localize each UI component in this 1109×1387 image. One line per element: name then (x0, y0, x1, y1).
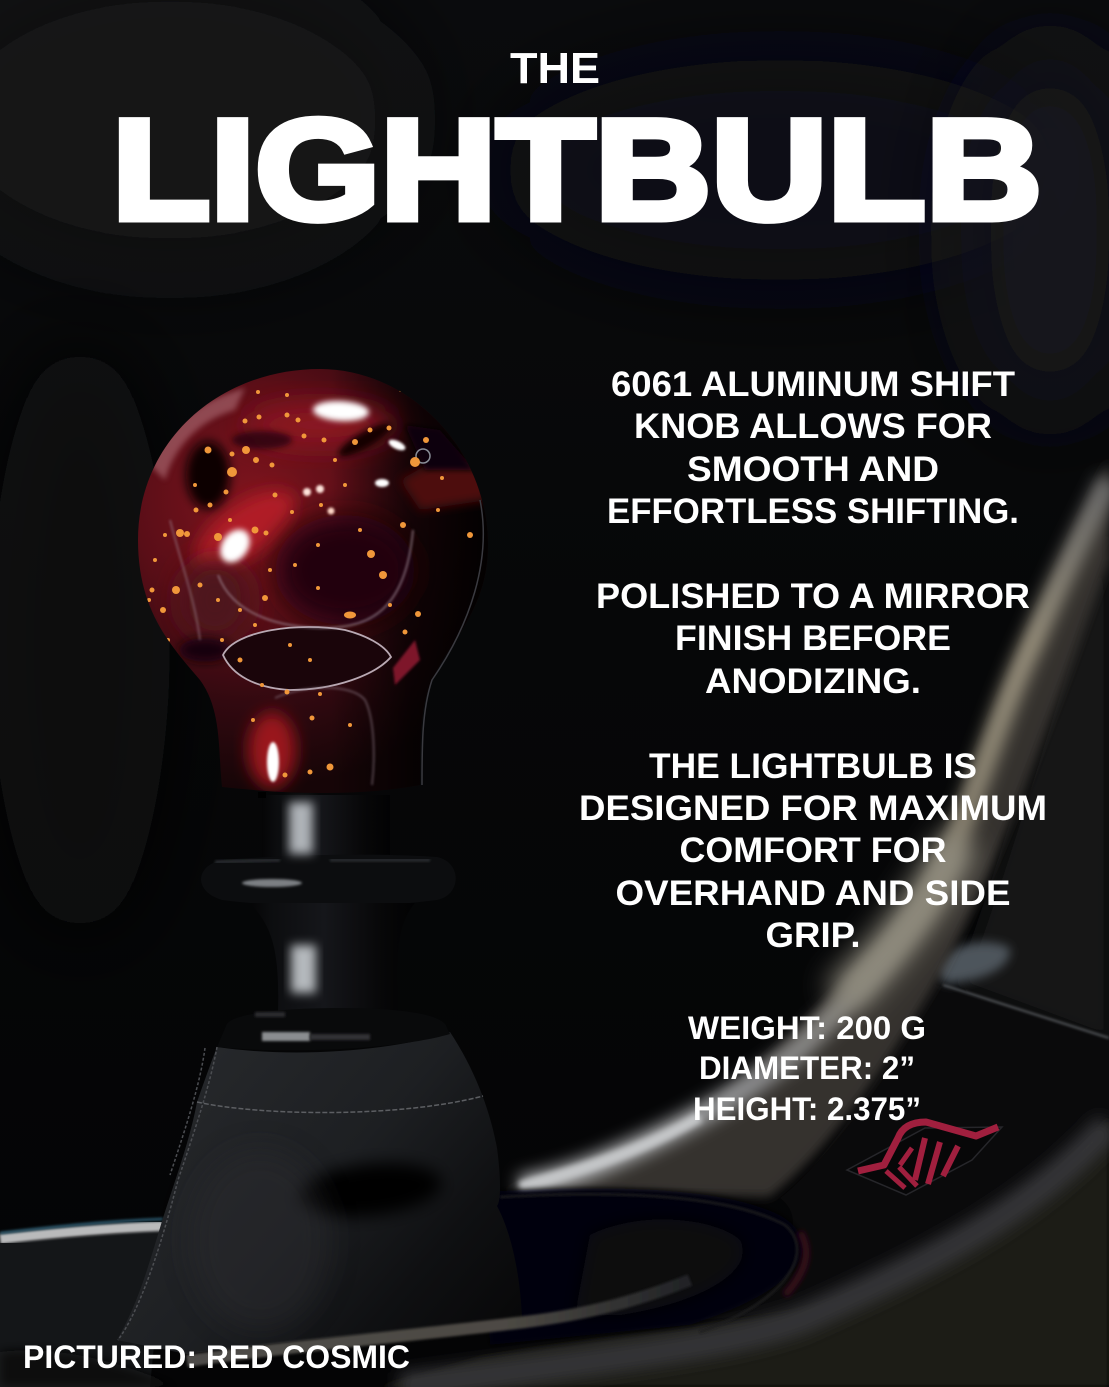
title (112, 44, 1042, 250)
icon: STI badge (847, 1122, 1002, 1195)
text block: polish: POLISHED TO A MIRROR (596, 577, 1030, 616)
text block: aluminum: EFFORTLESS SHIFTING. (607, 492, 1019, 531)
text block: polish: FINISH BEFORE (675, 619, 951, 658)
text block: aluminum: KNOB ALLOWS FOR (634, 407, 992, 446)
lower spoke highlight (933, 942, 1010, 984)
text block: comfort: COMFORT FOR (680, 831, 946, 870)
text block: specifications: HEIGHT: 2.375” (693, 1091, 921, 1127)
orange speckles (147, 388, 473, 778)
base collar (217, 1008, 450, 1050)
column highlight (289, 802, 313, 854)
caption: PICTURED: RED COSMIC (23, 1339, 410, 1375)
text block: comfort: OVERHAND AND SIDE (616, 874, 1010, 913)
right side shadow (138, 369, 488, 793)
knob body (138, 369, 488, 793)
text block: aluminum (607, 365, 1019, 531)
title: the: THE (510, 44, 600, 93)
text block: comfort: GRIP. (766, 916, 860, 955)
white highlights (313, 400, 369, 422)
text block: polish (596, 577, 1030, 701)
bowl reflection (218, 530, 413, 628)
inner console ring (480, 1188, 806, 1345)
title: lightbulb: LIGHTBULB (112, 91, 1042, 250)
shift knob (138, 369, 488, 793)
right side shadow panel (960, 520, 1109, 1040)
steering wheel (505, 460, 1109, 1320)
shifter post (201, 792, 456, 1050)
dark patches (186, 441, 230, 509)
steering wheel lower rim (380, 1117, 1109, 1387)
text block: polish: ANODIZING. (705, 662, 921, 701)
text block: comfort: THE LIGHTBULB IS (649, 747, 977, 786)
stitching (197, 1096, 483, 1113)
text block: comfort: DESIGNED FOR MAXIMUM (579, 789, 1047, 828)
text block: specifications (688, 1010, 926, 1127)
gear boot (117, 1032, 690, 1361)
carbon insert (700, 985, 1109, 1320)
text block: comfort (579, 747, 1047, 955)
text block: aluminum: 6061 ALUMINUM SHIFT (611, 365, 1015, 404)
text block: aluminum: SMOOTH AND (687, 450, 939, 489)
rim streak (187, 1280, 690, 1361)
leather body (117, 1032, 522, 1354)
stem highlight (291, 945, 316, 993)
reflected badge (393, 640, 420, 685)
reflections and glow (147, 388, 488, 788)
flared stem (250, 903, 415, 1012)
grip ring (201, 855, 456, 906)
text block: specifications: WEIGHT: 200 G (688, 1010, 926, 1046)
lens shaped reflection (223, 627, 391, 690)
left console (0, 1219, 180, 1387)
text block: specifications: DIAMETER: 2” (699, 1050, 915, 1086)
upper column (262, 795, 390, 861)
lit rim band (505, 460, 1109, 1197)
